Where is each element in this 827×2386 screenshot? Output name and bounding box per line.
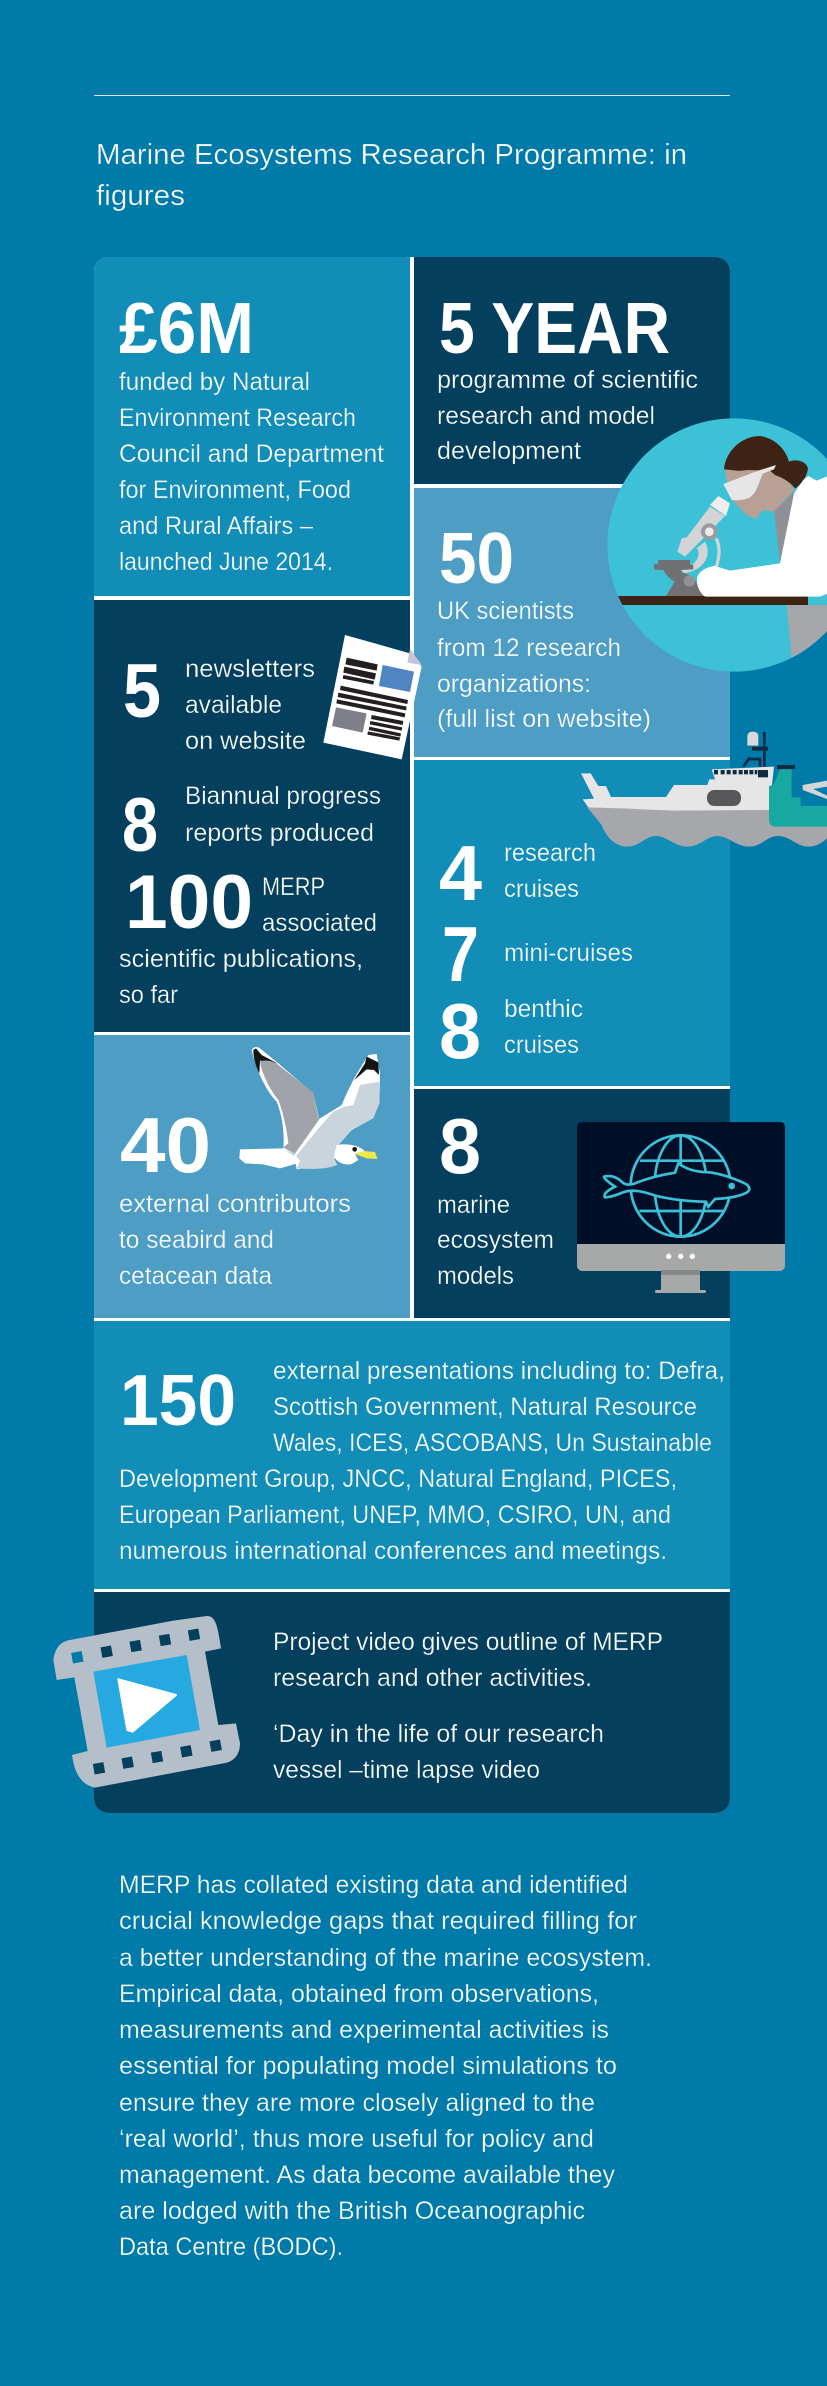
five year text: development (437, 437, 581, 465)
presentations text: 150 (120, 1361, 236, 1441)
presentations text (119, 1357, 725, 1565)
presentations text: Scottish Government, Natural Resource (273, 1393, 697, 1421)
contributors text (119, 1101, 351, 1290)
cruises text: cruises (504, 1031, 579, 1059)
closing paragraph: crucial knowledge gaps that required filling for (119, 1907, 637, 1935)
cruises text: 8 (439, 987, 481, 1075)
models text: marine (437, 1191, 510, 1219)
closing paragraph: measurements and experimental activities is (119, 2016, 609, 2044)
publications text: Biannual progress (185, 782, 381, 810)
five year text: 5 YEAR (439, 289, 670, 369)
panel: contributors (94, 1035, 410, 1318)
closing paragraph: ensure they are more closely aligned to the (119, 2089, 595, 2117)
icon: newspaper (323, 635, 422, 759)
panel: funding (94, 257, 410, 596)
scientists text: UK scientists (437, 597, 574, 625)
closing paragraph: management. As data become available they (119, 2161, 615, 2189)
closing paragraph (119, 1871, 652, 2261)
five year text: programme of scientific (437, 366, 698, 394)
presentations text: European Parliament, UNEP, MMO, CSIRO, UN, and (119, 1501, 671, 1529)
publications text: so far (119, 981, 178, 1009)
scientists text (437, 519, 651, 733)
icon: scientist at microscope (607, 418, 827, 672)
cruises text (439, 829, 633, 1075)
closing paragraph: ‘real world’, thus more useful for policy and (119, 2125, 594, 2153)
funding text: Environment Research (119, 404, 356, 432)
funding text: and Rural Affairs – (119, 512, 313, 540)
publications text: 100 (125, 860, 253, 945)
closing paragraph: Data Centre (BODC). (119, 2233, 343, 2261)
presentations text: Development Group, JNCC, Natural England, PICES, (119, 1465, 677, 1493)
cruises text: research (504, 839, 596, 867)
contributors text: cetacean data (119, 1262, 272, 1290)
models text: models (437, 1262, 514, 1290)
publications text: 8 (122, 783, 158, 868)
cruises text: 4 (439, 829, 482, 917)
contributors text: 40 (120, 1101, 211, 1189)
presentations text: external presentations including to: Defra, (273, 1357, 725, 1385)
publications text: 5 (123, 649, 161, 734)
icon: film strip with play button (53, 1616, 240, 1788)
closing paragraph: MERP has collated existing data and identified (119, 1871, 628, 1899)
funding text: funded by Natural (119, 368, 310, 396)
scientists text: 50 (439, 519, 514, 599)
five year text: research and model (437, 402, 655, 430)
publications text (119, 649, 381, 1009)
funding text: for Environment, Food (119, 476, 351, 504)
funding text (119, 289, 384, 576)
panel: five year (414, 257, 730, 484)
publications text: MERP (262, 873, 325, 901)
presentations text: numerous international conferences and meetings. (119, 1537, 667, 1565)
publications text: available (185, 691, 282, 719)
scientists text: from 12 research (437, 634, 621, 662)
funding text: £6M (119, 289, 254, 369)
five year text (437, 289, 698, 465)
video text: research and other activities. (273, 1664, 592, 1692)
publications text: newsletters (185, 655, 315, 683)
cruises text: mini-cruises (504, 939, 633, 967)
video text: ‘Day in the life of our research (273, 1720, 604, 1748)
icon: seagull (239, 1047, 380, 1169)
video text: vessel –time lapse video (273, 1756, 540, 1784)
panel grid (94, 257, 730, 1813)
closing paragraph: Empirical data, obtained from observations, (119, 1980, 599, 2008)
models text (437, 1102, 554, 1290)
publications text: on website (185, 727, 306, 755)
scientists text: organizations: (437, 670, 591, 698)
panel: publications (94, 600, 410, 1032)
contributors text: to seabird and (119, 1226, 274, 1254)
closing paragraph: a better understanding of the marine ecosystem. (119, 1944, 652, 1972)
funding text: Council and Department (119, 440, 384, 468)
title: Marine Ecosystems Research Programme: in (96, 139, 687, 171)
contributors text: external contributors (119, 1190, 351, 1218)
video text (273, 1628, 663, 1784)
cruises text: benthic (504, 995, 583, 1023)
title: figures (96, 180, 185, 212)
publications text: associated (262, 909, 377, 937)
cruises text: 7 (442, 910, 479, 998)
icon: research ship (581, 732, 827, 847)
panel: presentations (94, 1321, 730, 1589)
presentations text: Wales, ICES, ASCOBANS, Un Sustainable (273, 1429, 712, 1457)
models text: ecosystem (437, 1226, 554, 1254)
panel: models (414, 1089, 730, 1318)
models text: 8 (439, 1102, 481, 1190)
panel: cruises (414, 760, 730, 1086)
publications text: reports produced (185, 819, 374, 847)
panel: video (94, 1592, 730, 1813)
funding text: launched June 2014. (119, 548, 333, 576)
icon: monitor with globe and fish (577, 1122, 785, 1293)
title (96, 139, 687, 212)
closing paragraph: essential for populating model simulations to (119, 2052, 617, 2080)
publications text: scientific publications, (119, 945, 363, 973)
closing paragraph: are lodged with the British Oceanographic (119, 2197, 585, 2225)
cruises text: cruises (504, 875, 579, 903)
scientists text: (full list on website) (437, 705, 651, 733)
panel: scientists (414, 488, 730, 757)
video text: Project video gives outline of MERP (273, 1628, 663, 1656)
